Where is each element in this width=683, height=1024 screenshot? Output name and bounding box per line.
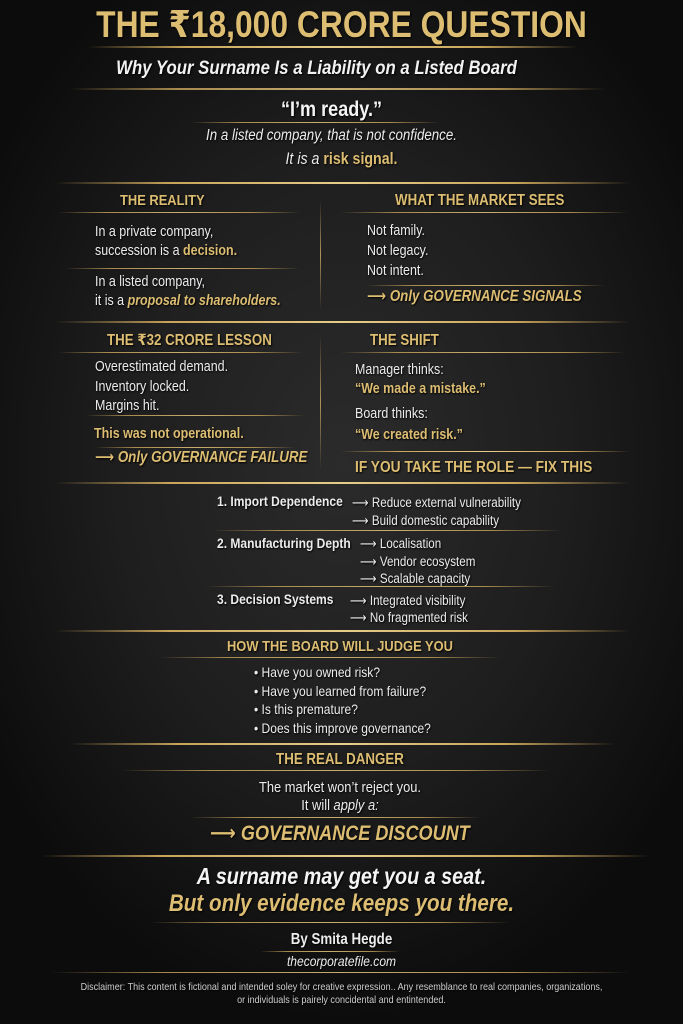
panel: how the board will judge [164, 638, 496, 738]
text: not family list: Not intent. [367, 263, 424, 279]
disclaimer: Disclaimer: This content is fictional and intended soley for creative expression.. Any resemblance to real companies, organizations, [81, 981, 602, 993]
text: private company: In a private company, [95, 224, 213, 240]
website: thecorporatefile.com [287, 953, 396, 969]
list: fix items: ⟶ Integrated visibility [350, 593, 465, 608]
text: listed company: it is a proposal to shareholders. [95, 293, 281, 309]
item 1: 1. Import Dependence [217, 493, 343, 509]
title: THE ₹18,000 CRORE QUESTION [96, 4, 587, 45]
bullets: • Does this improve governance? [254, 720, 431, 736]
text: But only evidence keeps you there. [169, 890, 514, 917]
quote: I'm ready: “I’m ready.” [281, 98, 382, 121]
panel: what the market sees [344, 192, 625, 306]
panel: the shift [343, 332, 628, 476]
list: fix items: ⟶ No fragmented risk [350, 610, 468, 625]
text: listed company [95, 274, 281, 309]
heading: the reality: THE REALITY [120, 192, 205, 209]
bullets [254, 664, 432, 738]
arrow: governance failure: ⟶ Only GOVERNANCE FAILURE [95, 449, 307, 466]
list: fix items: ⟶ Vendor ecosystem [360, 554, 475, 569]
text: causes [95, 359, 228, 414]
list: fix items: ⟶ Scalable capacity [360, 571, 470, 586]
panel: the reality [60, 192, 297, 309]
text: board thinks [355, 406, 464, 443]
text: causes: Margins hit. [95, 398, 159, 414]
bullets: • Have you owned risk? [254, 664, 380, 680]
heading: fix this: IF YOU TAKE THE ROLE — FIX THIS [355, 459, 592, 476]
author: By Smita Hegde [291, 931, 392, 948]
panel: real danger [125, 751, 545, 845]
list: fix items: ⟶ Reduce external vulnerability [352, 495, 521, 510]
text: risk signal: It is a risk signal. [285, 150, 398, 168]
text: causes: Overestimated demand. [95, 359, 228, 375]
text: board thinks: Board thinks: [355, 406, 428, 422]
disclaimer [81, 981, 602, 1006]
heading: market sees: WHAT THE MARKET SEES [395, 192, 564, 209]
text: won't reject: It will apply a: [301, 797, 379, 814]
heading: 32 crore lesson: THE ₹32 CRORE LESSON [107, 332, 272, 349]
item 2: 2. Manufacturing Depth [217, 535, 351, 551]
disclaimer: or individuals is pairely concidental and entintended. [237, 994, 446, 1006]
text: not operational: This was not operational. [94, 426, 244, 442]
text: not family list: Not legacy. [367, 243, 428, 259]
text: causes: Inventory locked. [95, 378, 189, 394]
heading: the shift: THE SHIFT [370, 332, 439, 349]
text: won't reject [259, 779, 421, 814]
arrow: governance signals: ⟶ Only GOVERNANCE SIGNALS [367, 288, 582, 305]
text: private company: succession is a decision. [95, 243, 237, 259]
text: manager thinks: Manager thinks: [355, 362, 444, 378]
text: not family list [367, 223, 428, 279]
list: fix items: ⟶ Build domestic capability [352, 513, 499, 528]
text: not family list: Not family. [367, 223, 425, 239]
subtitle: Why Your Surname Is a Liability on a Listed Board [116, 57, 517, 79]
bullets: • Have you learned from failure? [254, 682, 426, 698]
bullets: • Is this premature? [254, 701, 358, 717]
text: manager thinks: “We made a mistake.” [355, 381, 486, 397]
list: fix items [210, 493, 558, 626]
text: private company [95, 224, 238, 259]
text: manager thinks [355, 362, 486, 397]
list: fix items: ⟶ Localisation [360, 536, 441, 551]
quote: closing: A surname may get you a seat. [197, 863, 486, 889]
text: won't reject: The market won’t reject you. [259, 779, 421, 796]
item 3: 3. Decision Systems [217, 591, 333, 607]
text: board thinks: “We created risk.” [355, 427, 463, 443]
text: not confidence: In a listed company, that is not confidence. [206, 127, 457, 144]
text: listed company: In a listed company, [95, 274, 205, 290]
heading: judge: HOW THE BOARD WILL JUDGE YOU [227, 638, 453, 655]
heading: real danger: THE REAL DANGER [276, 751, 404, 768]
panel: 32 crore lesson [61, 332, 309, 467]
callout: governance discount: ⟶ GOVERNANCE DISCOUNT [210, 822, 470, 845]
